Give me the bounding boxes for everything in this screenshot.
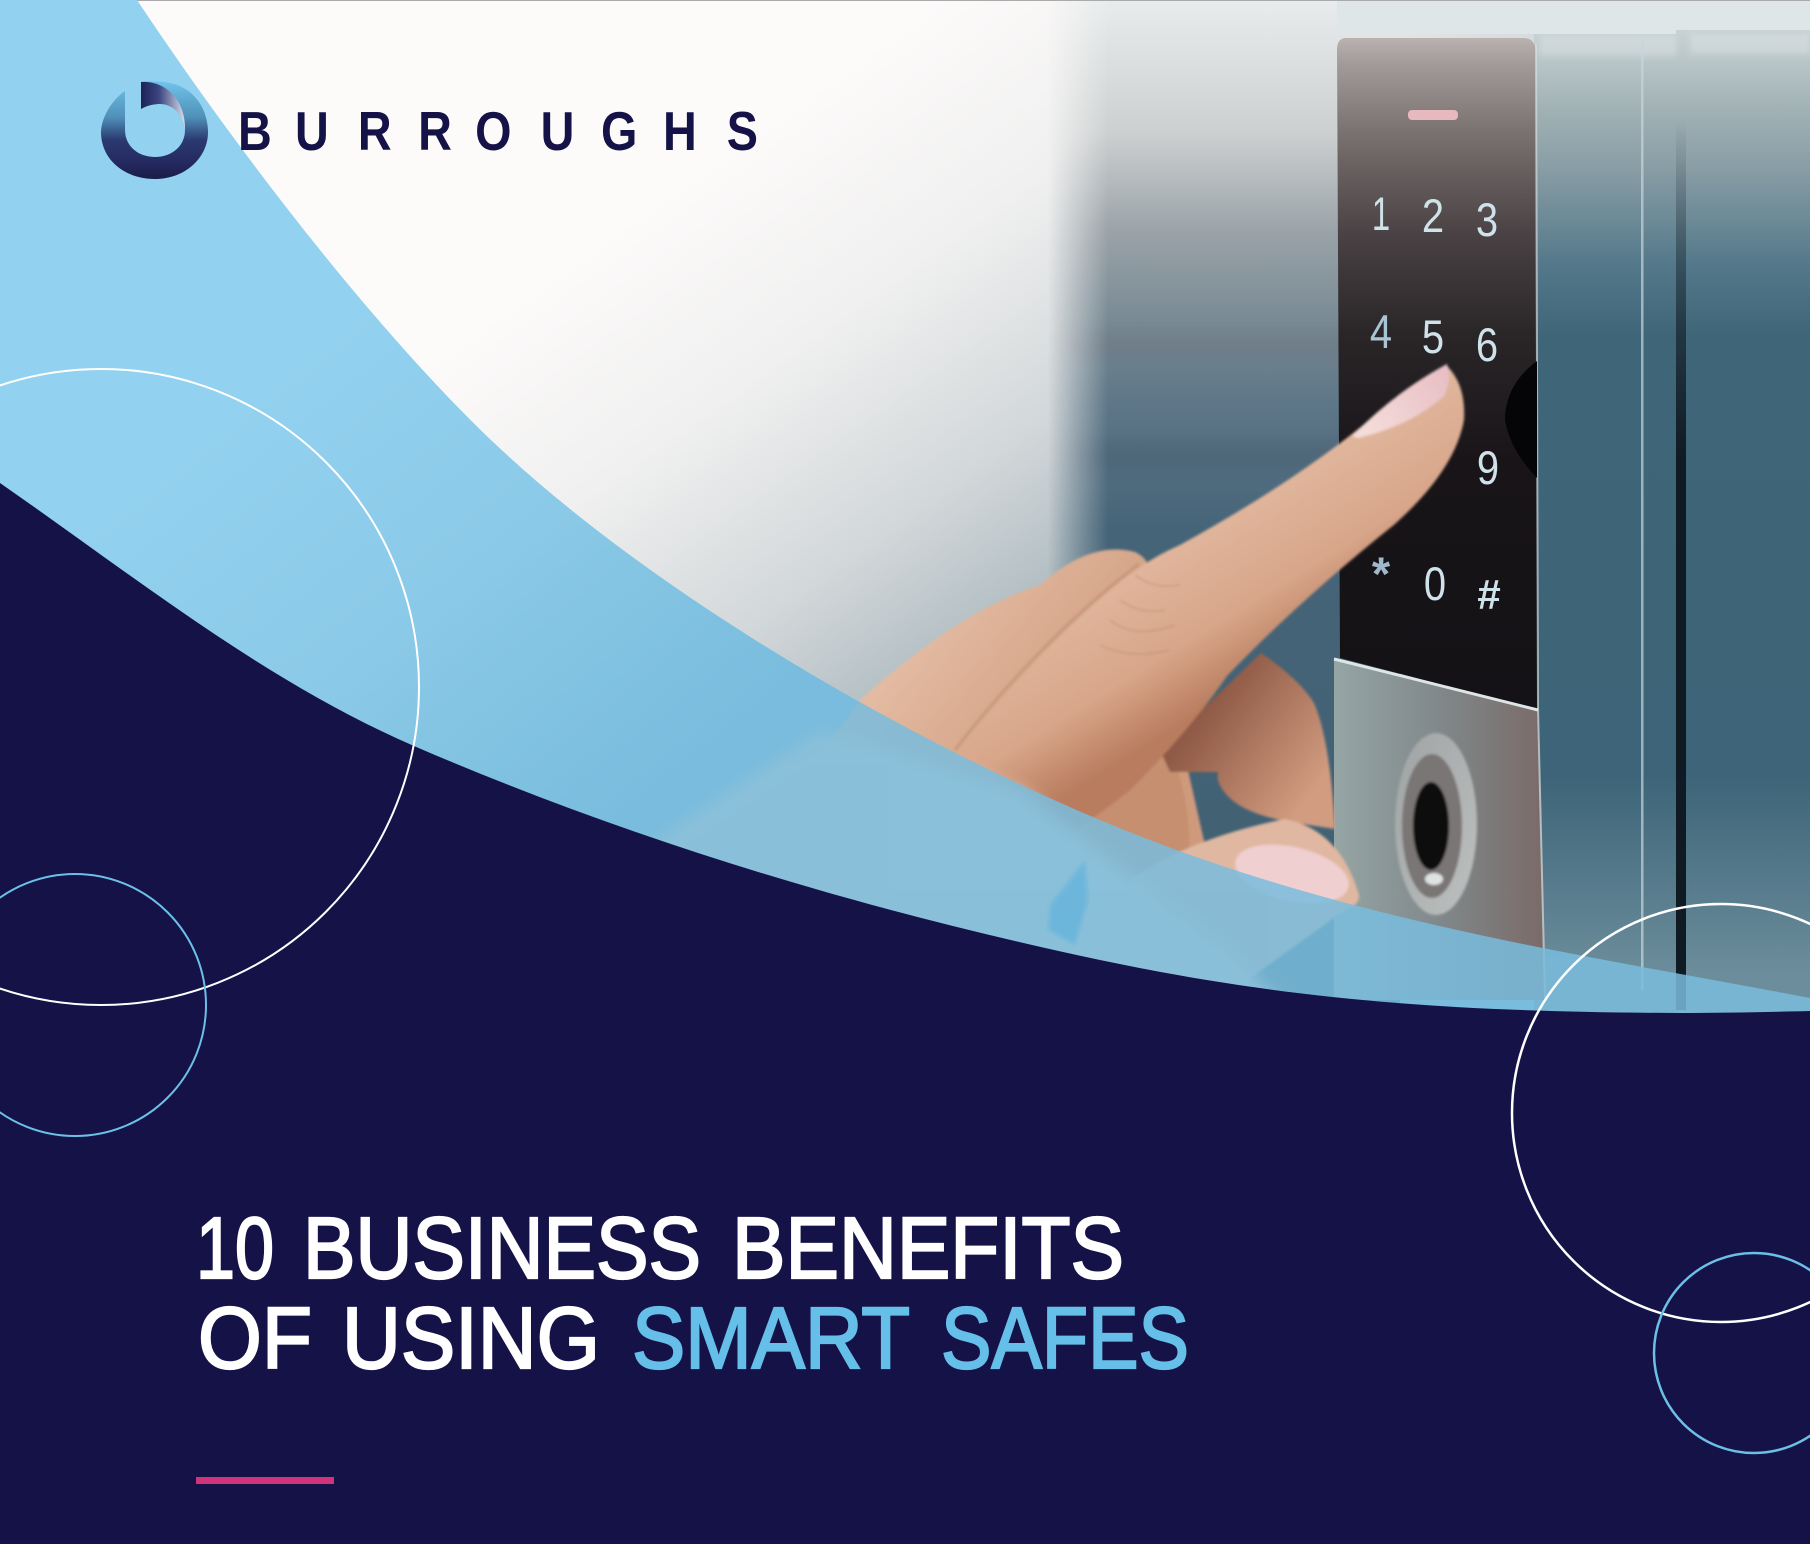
- keypad digits: 6: [1476, 320, 1498, 372]
- photo subject: wall, safe and hand: [640, 0, 1810, 1100]
- wordmark: BURROUGHS: [238, 100, 758, 162]
- light blue sweeping curve: [0, 0, 1810, 1020]
- keypad lower plate: [1334, 658, 1546, 1000]
- keypad digits: 0: [1424, 559, 1446, 611]
- logo: Burroughs: [101, 81, 758, 179]
- LED indicator: [1408, 110, 1458, 120]
- thumbnail: [1229, 835, 1355, 913]
- photo showing faintly through the blue curve: [657, 702, 1810, 1013]
- keypad digits: #: [1477, 571, 1501, 618]
- crease between index and back finger: [955, 564, 1139, 750]
- title line 1: BUSINESS: [303, 1200, 701, 1297]
- icon: logo ring: [101, 81, 208, 179]
- knuckle wrinkles: [1100, 575, 1180, 654]
- keypad digits: [1370, 187, 1501, 618]
- curled middle finger: [1160, 653, 1335, 829]
- photo: finger pressing the keypad of a smart safe: [138, 1, 1810, 998]
- blurred wall behind the safe: [1052, 1, 1400, 1003]
- keypad digits: 2: [1422, 191, 1444, 243]
- keypad digits: 4: [1370, 307, 1392, 359]
- navy lower panel: [0, 483, 1810, 1544]
- lower hand and palm beneath the curve: [640, 730, 1300, 1020]
- title line 1: 10: [196, 1200, 274, 1297]
- plate top highlight: [1334, 659, 1538, 710]
- reflection on keypad: [1505, 361, 1537, 478]
- keypad digits: *: [1372, 547, 1391, 600]
- keypad digits: 1: [1372, 187, 1390, 240]
- keypad digits: 5: [1422, 312, 1444, 364]
- nail: [1352, 364, 1449, 438]
- light strip above the safe: [1337, 0, 1810, 34]
- title line 2: [198, 1290, 1189, 1387]
- title line 2: SMART: [632, 1290, 910, 1387]
- fingerprint sensor: [1395, 733, 1477, 915]
- decorative circle: large white right: [1512, 904, 1810, 1322]
- keypad panel: [1337, 38, 1538, 710]
- lower palm under index finger: [980, 735, 1189, 1000]
- title line 1: BENEFITS: [732, 1200, 1124, 1297]
- index finger: [950, 366, 1464, 850]
- title line 2: OF: [198, 1290, 312, 1387]
- photo backdrop: [0, 0, 1810, 1100]
- thumb: [1100, 819, 1359, 1000]
- title line 2: USING: [342, 1290, 600, 1387]
- accent bar: [196, 1477, 334, 1484]
- gap between fingers beneath the curve: [1048, 860, 1088, 945]
- decorative circle: small blue right: [1654, 1253, 1810, 1453]
- title line 2: SAFES: [941, 1290, 1189, 1387]
- title line 1: [196, 1200, 1124, 1297]
- keypad digits: 3: [1476, 195, 1498, 247]
- top edge line: [0, 0, 1810, 1]
- decorative circle: small blue left: [0, 874, 206, 1136]
- title: [196, 1200, 1189, 1387]
- panel edge highlight: [1536, 44, 1545, 1000]
- keypad digits: 9: [1477, 443, 1499, 495]
- decorative circle: large white left: [0, 369, 419, 1005]
- safe door body: [1534, 30, 1810, 1030]
- hand: [640, 364, 1464, 1000]
- back finger: [640, 549, 1240, 1000]
